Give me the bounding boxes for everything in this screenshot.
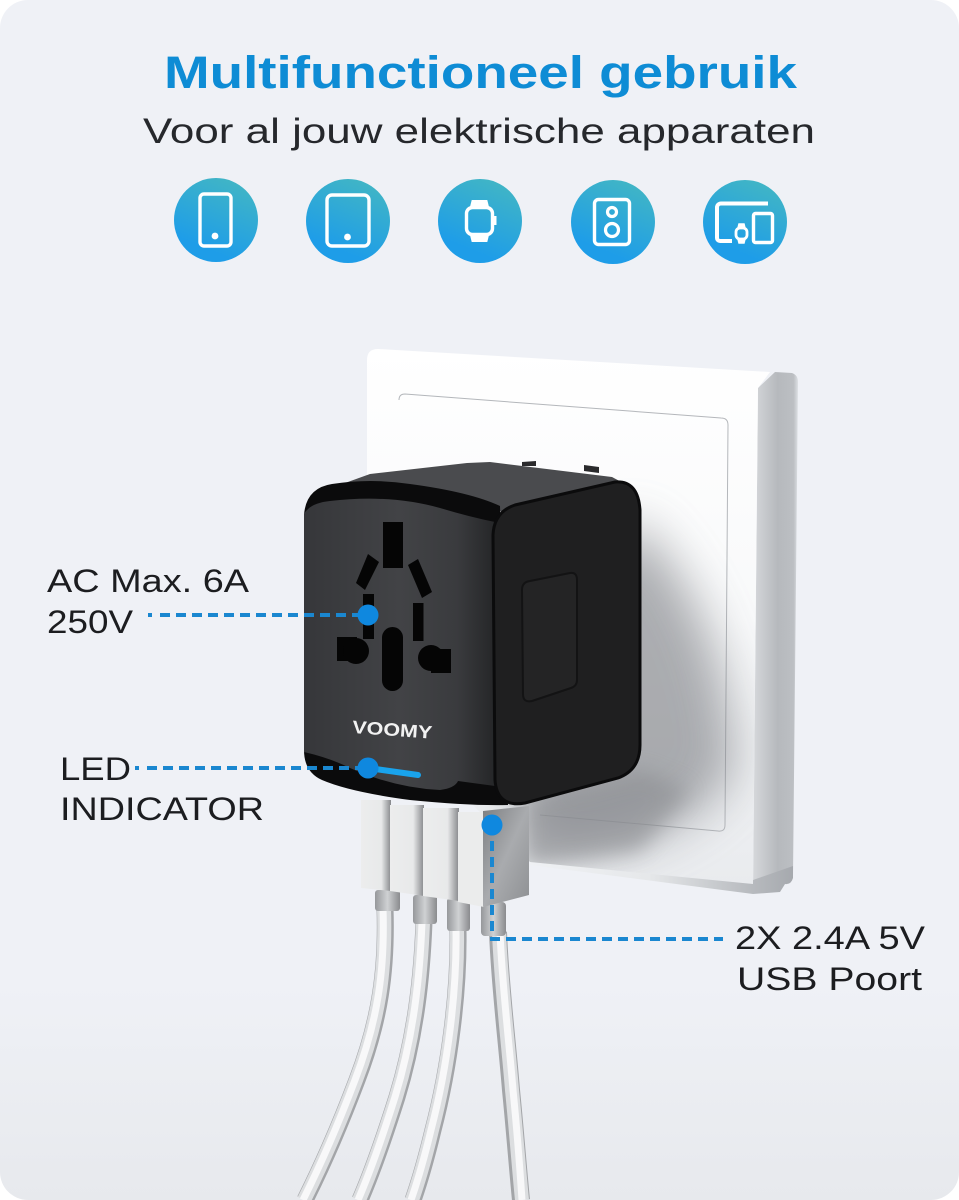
device icons row — [174, 178, 787, 264]
icon: smartwatch — [438, 179, 522, 263]
universal socket slots — [337, 522, 451, 691]
marker dot — [358, 604, 378, 626]
cable 4 — [498, 932, 522, 1200]
adapter front face — [304, 499, 495, 790]
travel adapter — [304, 461, 640, 805]
leader line — [148, 613, 368, 617]
callout: AC socket — [47, 563, 378, 640]
connector 4 side — [483, 806, 529, 907]
cable 1 — [303, 908, 385, 1200]
plate bottom bevel — [530, 860, 793, 894]
icon: multiple devices — [703, 180, 787, 264]
connector 4 front — [458, 812, 484, 907]
adapter top face — [345, 462, 625, 512]
label: AC Max: AC Max. 6A — [47, 563, 250, 599]
plate right bevel — [753, 372, 798, 893]
marker dot — [482, 814, 502, 836]
leader line — [135, 766, 368, 770]
wall socket plate — [367, 349, 798, 894]
callout: LED indicator — [60, 751, 378, 827]
connector 3 — [423, 808, 459, 901]
icon: speaker — [571, 180, 655, 264]
plate inner frame — [399, 394, 728, 831]
LED bar — [368, 768, 418, 775]
label: 250V: 250V — [47, 604, 134, 640]
adapter cast shadow — [500, 520, 735, 866]
label: USB Poort: USB Poort — [737, 961, 922, 997]
title: Multifunctioneel gebruik — [164, 47, 798, 98]
USB connectors — [361, 800, 529, 936]
subtitle: Voor al jouw elektrische apparaten — [143, 112, 815, 151]
brand name: VOOMY — [352, 717, 433, 743]
cable 2 — [358, 922, 424, 1200]
label: INDICATOR: INDICATOR — [60, 791, 264, 827]
icon: tablet — [306, 179, 390, 263]
icon: smartphone — [174, 178, 258, 262]
adapter side face — [493, 482, 640, 804]
label: 2X 2.4A 5V: 2X 2.4A 5V — [735, 920, 926, 956]
cable 3 — [411, 930, 458, 1200]
connector 1 — [361, 800, 391, 891]
plate face — [367, 349, 770, 884]
marker dot — [358, 758, 378, 778]
connector necks — [375, 890, 506, 936]
leader line — [492, 825, 723, 939]
callout: USB ports — [482, 814, 926, 997]
adapter front shell — [304, 481, 508, 805]
label: LED: LED — [60, 751, 131, 787]
connector 2 — [390, 805, 424, 896]
rear pins — [522, 461, 599, 473]
cables — [303, 908, 522, 1200]
side button — [522, 573, 577, 701]
